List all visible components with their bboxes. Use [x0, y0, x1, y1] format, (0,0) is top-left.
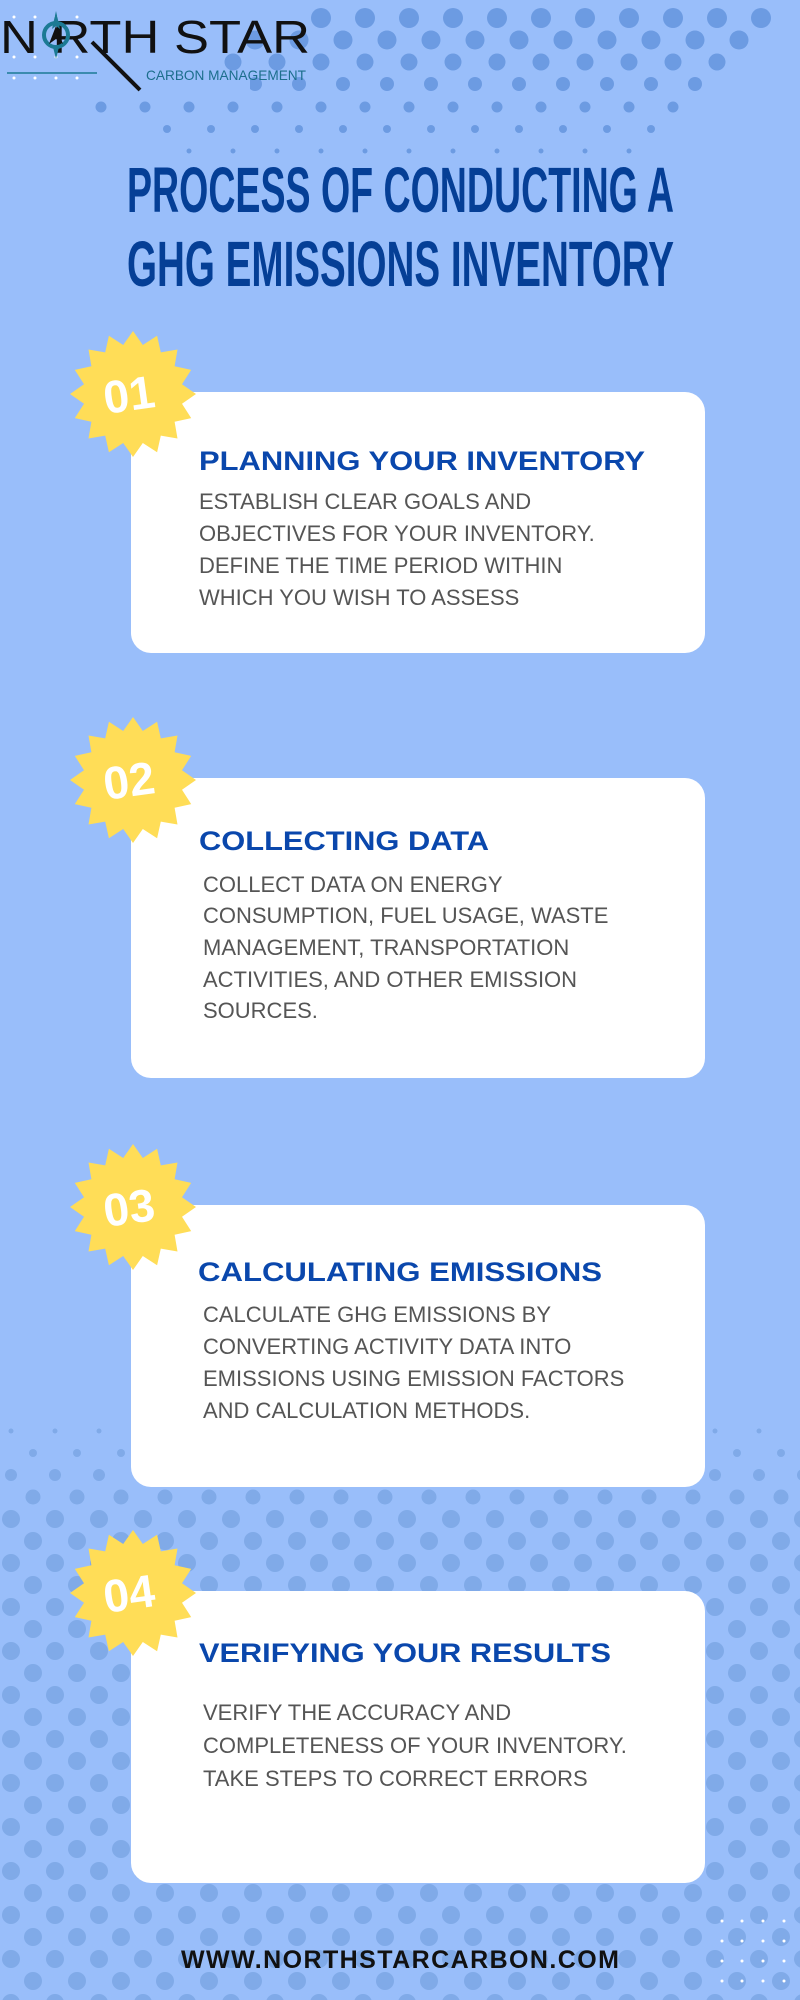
body 3: EMISSIONS USING EMISSION FACTORS [203, 1366, 624, 1391]
badge 04 [70, 1530, 196, 1656]
badge 02 [70, 717, 196, 843]
body 2: COLLECT DATA ON ENERGY [203, 872, 503, 897]
logo [0, 11, 310, 90]
panel: step 1 [70, 331, 705, 653]
heading 4: VERIFYING YOUR RESULTS [199, 1638, 611, 1668]
badge 02: 02 [100, 751, 158, 810]
body 1: ESTABLISH CLEAR GOALS AND [199, 489, 531, 514]
badge 04: 04 [100, 1564, 158, 1623]
body 2 [203, 872, 608, 1023]
body 4: COMPLETENESS OF YOUR INVENTORY. [203, 1733, 627, 1758]
title [127, 154, 674, 300]
heading 3: CALCULATING EMISSIONS [198, 1257, 602, 1287]
badge 01: 01 [100, 365, 158, 424]
halftone dots bottom [0, 1420, 800, 2000]
body 4: VERIFY THE ACCURACY AND [203, 1700, 511, 1725]
heading 2: COLLECTING DATA [199, 826, 489, 856]
body 4: TAKE STEPS TO CORRECT ERRORS [203, 1766, 588, 1791]
heading 1: PLANNING YOUR INVENTORY [199, 446, 645, 476]
logo: white dots [12, 16, 78, 80]
logo: diagonal [92, 42, 140, 90]
body 1 [199, 489, 595, 610]
halftone dots top [80, 6, 790, 162]
body 2: ACTIVITIES, AND OTHER EMISSION [203, 967, 577, 992]
badge 03 [70, 1144, 196, 1270]
footer url: WWW.NORTHSTARCARBON.COM [181, 1946, 619, 1974]
panel: step 2 [70, 717, 705, 1078]
body 1: DEFINE THE TIME PERIOD WITHIN [199, 553, 562, 578]
body 3: CONVERTING ACTIVITY DATA INTO [203, 1334, 571, 1359]
badge 01 [70, 331, 196, 457]
body 3: CALCULATE GHG EMISSIONS BY [203, 1302, 551, 1327]
body 3 [203, 1302, 624, 1423]
body 1: WHICH YOU WISH TO ASSESS [199, 585, 519, 610]
logo: wordmark: N RTH STAR [0, 11, 310, 63]
body 2: SOURCES. [203, 998, 318, 1023]
body 2: CONSUMPTION, FUEL USAGE, WASTE [203, 903, 608, 928]
body 2: MANAGEMENT, TRANSPORTATION [203, 935, 569, 960]
body 1: OBJECTIVES FOR YOUR INVENTORY. [199, 521, 595, 546]
panel: step 3 [70, 1144, 705, 1487]
panel: step 4 [70, 1530, 705, 1883]
body 3: AND CALCULATION METHODS. [203, 1398, 530, 1423]
logo: compass [44, 11, 68, 59]
body 4 [203, 1700, 627, 1791]
badge 03: 03 [100, 1178, 158, 1237]
logo: tagline: CARBON MANAGEMENT [146, 67, 306, 83]
decorative white dot grid [720, 1920, 786, 1982]
